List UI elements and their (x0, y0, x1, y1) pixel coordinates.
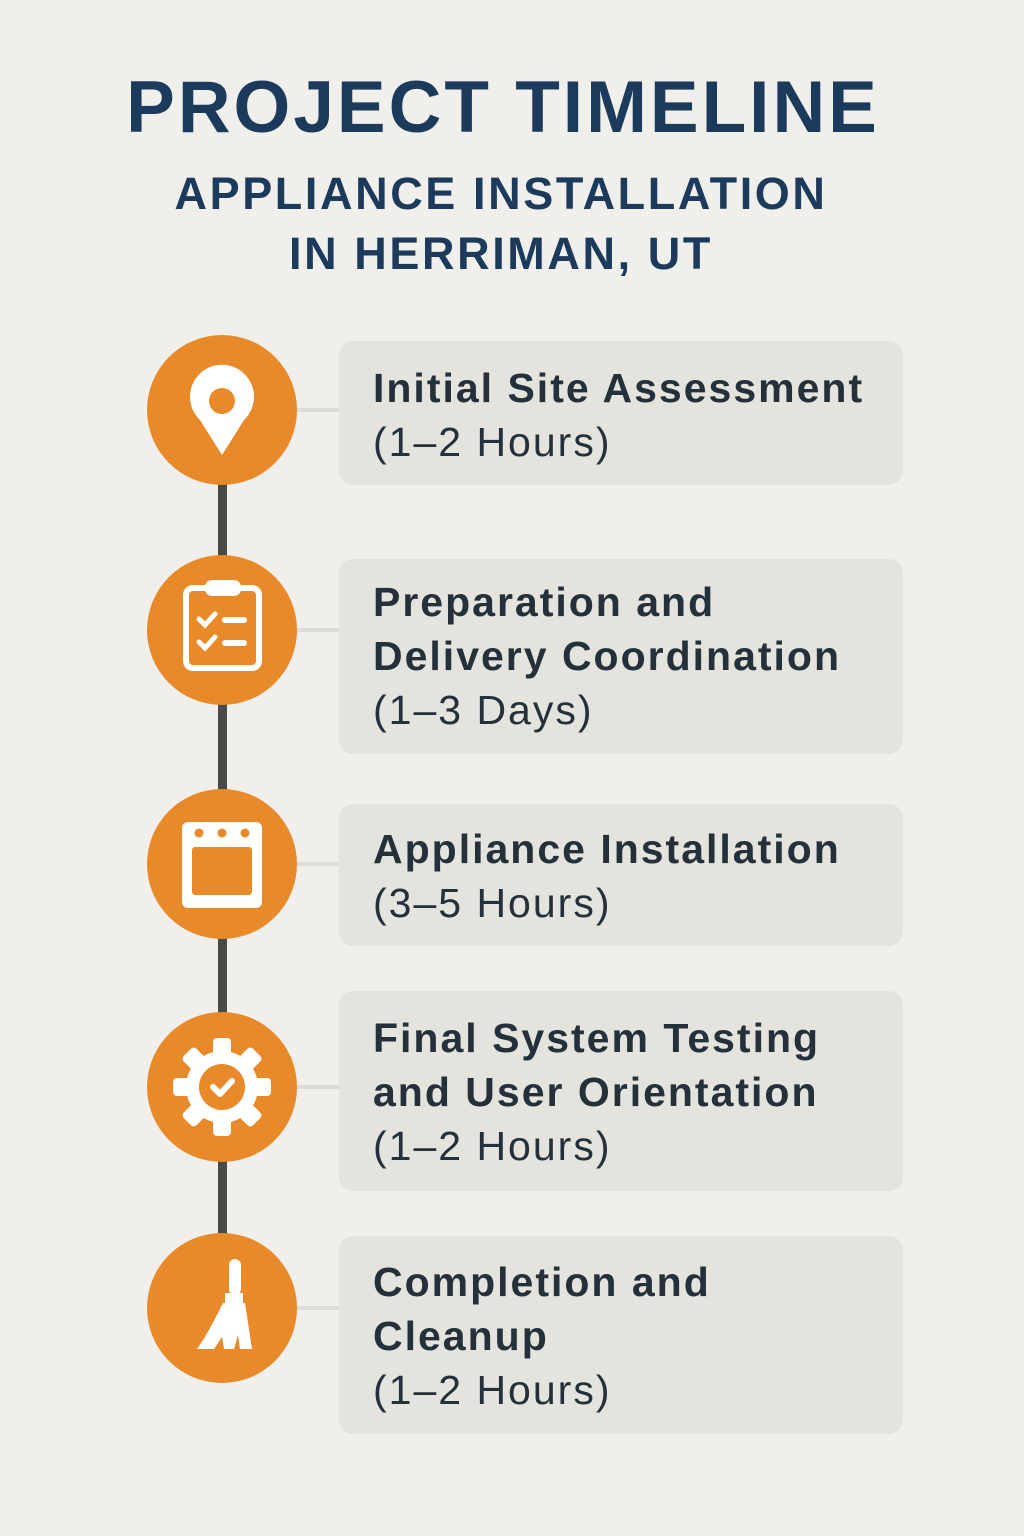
card: step 2 (339, 559, 903, 754)
card: step 5: (1–2 Hours) (373, 1367, 611, 1413)
title: PROJECT TIMELINE (126, 67, 880, 148)
icon: broom (147, 1233, 297, 1383)
icon: oven (147, 789, 297, 939)
card: step 3 (339, 804, 903, 946)
card: step 5: Completion and (373, 1259, 711, 1305)
subtitle (174, 168, 828, 279)
card: step 3: (3–5 Hours) (373, 880, 611, 926)
subtitle: IN HERRIMAN, UT (289, 228, 713, 279)
icon: location pin (147, 335, 297, 485)
card: step 1: Initial Site Assessment (373, 365, 864, 411)
timeline line (218, 410, 227, 1310)
icon: gear check (147, 1012, 297, 1162)
card: step 1: (1–2 Hours) (373, 419, 611, 465)
card: step 2: (1–3 Days) (373, 687, 594, 733)
card: step 2: Preparation and (373, 579, 715, 625)
card: step 4 (339, 991, 903, 1191)
card: step 1 (339, 341, 903, 485)
card: step 4: and User Orientation (373, 1069, 819, 1115)
subtitle: APPLIANCE INSTALLATION (174, 168, 828, 219)
card: step 4: Final System Testing (373, 1015, 820, 1061)
card: step 5 (339, 1236, 903, 1434)
card: step 2: Delivery Coordination (373, 633, 841, 679)
card: step 4: (1–2 Hours) (373, 1123, 611, 1169)
card: step 3: Appliance Installation (373, 826, 841, 872)
card: step 5: Cleanup (373, 1313, 549, 1359)
icon: clipboard (147, 555, 297, 705)
